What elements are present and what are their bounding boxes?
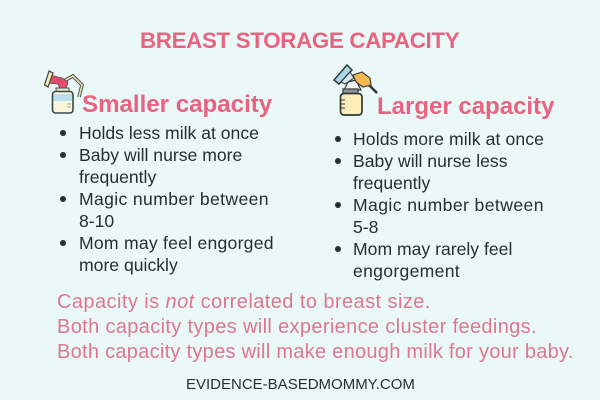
list: larger capacity points: Magic number between [353, 195, 544, 215]
list: larger capacity points: engorgement [353, 261, 460, 281]
icon: large breast pump [333, 64, 378, 116]
callout: capacity facts: Both capacity types will make enough milk for your baby. [57, 341, 574, 363]
callout: capacity facts: Both capacity types will experience cluster feedings. [57, 316, 537, 338]
list: smaller capacity points: frequently [79, 167, 156, 187]
list: larger capacity points: Baby will nurse less [353, 151, 508, 171]
list: smaller capacity points: Magic number between [79, 189, 269, 209]
list: smaller capacity points: more quickly [79, 255, 178, 275]
callout: capacity facts [57, 291, 574, 363]
list: larger capacity points: frequently [353, 173, 430, 193]
list: larger capacity points [335, 129, 544, 281]
list: larger capacity points: Holds more milk at once [353, 129, 544, 149]
title: BREAST STORAGE CAPACITY [140, 28, 459, 53]
panel: larger capacity [333, 64, 554, 281]
list: smaller capacity points: Baby will nurse more [79, 145, 242, 165]
list: larger capacity points: 5-8 [353, 217, 378, 237]
heading: smaller capacity: Smaller capacity [82, 91, 272, 118]
list: smaller capacity points: 8-10 [79, 211, 114, 231]
icon: small breast pump [44, 70, 84, 114]
list: smaller capacity points: Mom may feel engorged [79, 233, 274, 253]
footer: website: EVIDENCE-BASEDMOMMY.COM [186, 376, 415, 393]
panel: smaller capacity [44, 70, 274, 275]
heading: larger capacity: Larger capacity [377, 93, 554, 120]
list: smaller capacity points: Holds less milk at once [79, 123, 259, 143]
list: larger capacity points: Mom may rarely feel [353, 239, 512, 259]
callout: capacity facts: Capacity is not correlated to breast size. [57, 291, 431, 313]
list: smaller capacity points [60, 123, 274, 275]
